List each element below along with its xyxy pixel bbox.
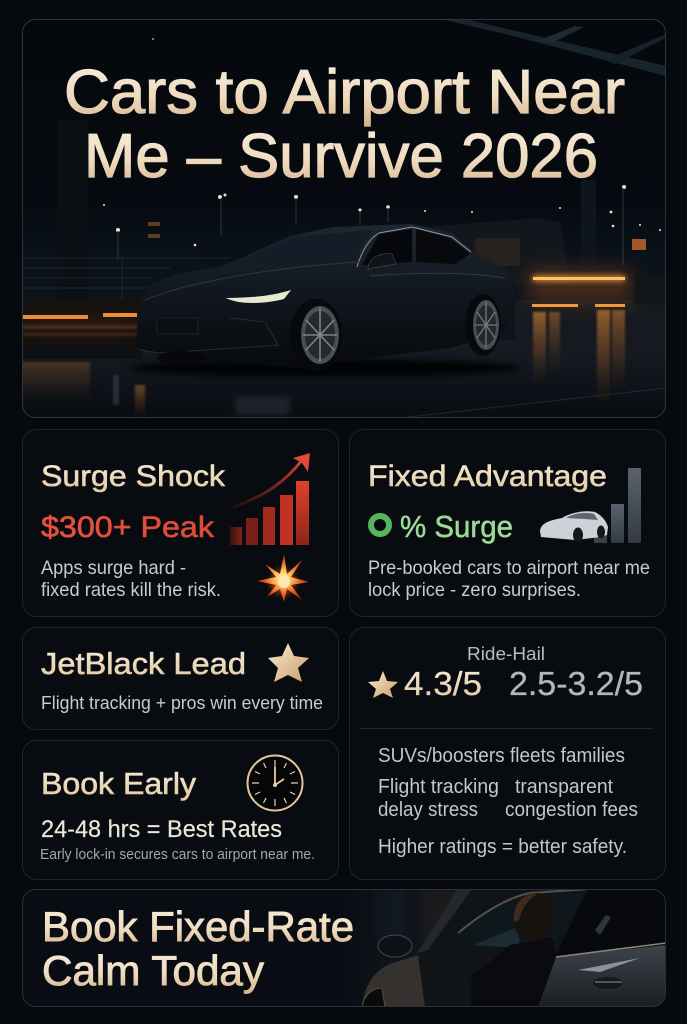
- title: Cars to Airport Near: [64, 58, 625, 127]
- heading: fixed advantage: Fixed Advantage: [368, 460, 607, 493]
- body text: fixed advantage: lock price - zero surprises.: [368, 579, 581, 601]
- stat: best rates: 24-48 hrs = Best Rates: [41, 816, 282, 843]
- feature list: congestion fees: [505, 799, 638, 821]
- panel: book early: [22, 740, 338, 880]
- title: Me – Survive 2026: [84, 122, 598, 191]
- panel: jetblack lead: [22, 628, 338, 730]
- feature list: delay stress: [378, 799, 478, 821]
- car: [130, 224, 520, 377]
- heading: surge shock: Surge Shock: [41, 460, 226, 493]
- heading: call to action: Book Fixed-Rate: [42, 903, 354, 950]
- icon: explosion burst: [257, 554, 309, 602]
- railing: [22, 258, 230, 300]
- photo: driver at open car door: [340, 889, 666, 1007]
- rating: ride-hail: 2.5-3.2/5: [509, 665, 643, 702]
- body text: surge shock: fixed rates kill the risk.: [41, 579, 221, 601]
- wheels: [157, 351, 204, 362]
- panel: fixed advantage: [350, 430, 666, 616]
- body text: surge shock: [41, 557, 221, 601]
- panel: surge shock: [22, 430, 338, 616]
- feature list: [378, 745, 638, 858]
- ground: [142, 340, 665, 356]
- title: [64, 58, 625, 191]
- icon: clock: [248, 756, 302, 810]
- icon: white car with bars: [540, 468, 641, 543]
- stat: $300+ peak: $300+ Peak: [41, 511, 215, 544]
- terminal building: [148, 218, 646, 274]
- icon: rising bars and arrow: [230, 453, 310, 545]
- heading: book early: Book Early: [41, 766, 197, 801]
- body text: jetblack lead: Flight tracking + pros win every time: [41, 693, 323, 713]
- panel: call to action: [22, 889, 666, 1007]
- heading: call to action: [42, 903, 354, 994]
- floor highlight lines: [400, 388, 666, 418]
- canopy beams: [445, 20, 665, 220]
- feature list: Flight tracking: [378, 776, 499, 798]
- heading: jetblack lead: JetBlack Lead: [41, 646, 246, 681]
- heading: call to action: Calm Today: [42, 947, 264, 994]
- icon: gold star: [268, 643, 309, 682]
- distant lights: [103, 38, 661, 265]
- orange glow strips: [22, 268, 666, 330]
- body text: surge shock: Apps surge hard -: [41, 557, 186, 579]
- feature list: Higher ratings = better safety.: [378, 836, 627, 858]
- windows: [282, 230, 372, 244]
- panel: ratings comparison: [350, 628, 666, 880]
- panel: hero photo: [22, 19, 666, 418]
- body text: fixed advantage: [368, 557, 650, 601]
- body text: book early: Early lock-in secures cars to airport near me.: [40, 846, 315, 863]
- feature list: SUVs/boosters fleets families: [378, 745, 625, 767]
- feature list: transparent: [515, 776, 613, 798]
- rating: fixed rate: [368, 665, 482, 702]
- grille: [157, 318, 198, 334]
- wet reflections: [22, 310, 625, 417]
- body text: fixed advantage: Pre-booked cars to airport near me: [368, 557, 650, 579]
- label: ride-hail: Ride-Hail: [467, 643, 545, 664]
- rating: fixed rate: 4.3/5: [404, 665, 482, 702]
- headlight: [226, 290, 291, 303]
- stat: 0% surge: % Surge: [400, 509, 513, 544]
